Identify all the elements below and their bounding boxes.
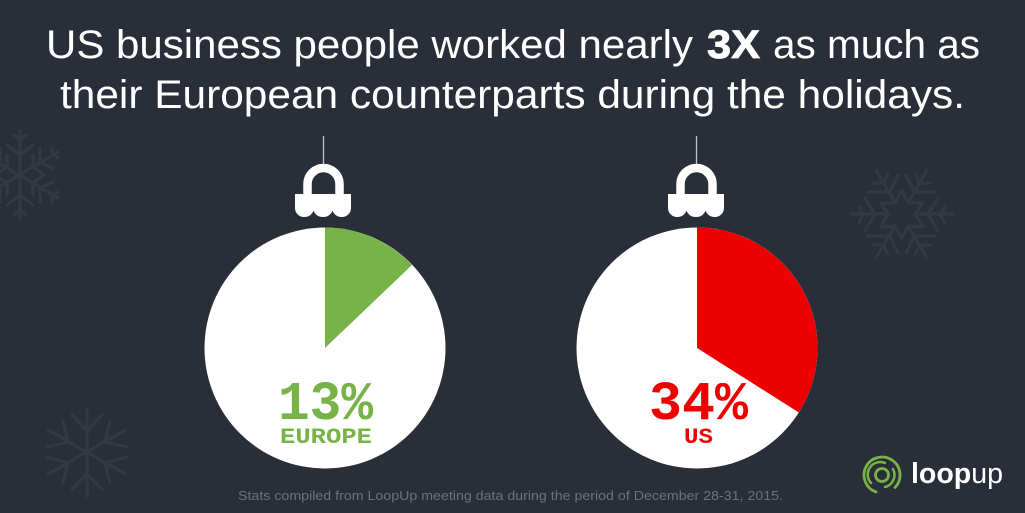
logo wordmark: loopup [911, 458, 1003, 490]
snowflake: left [0, 131, 58, 219]
logo: LoopUp [864, 457, 1003, 492]
ornament: Europe [204, 136, 446, 468]
title: 3X [707, 23, 760, 67]
title: their European counterparts during the holidays. [60, 73, 965, 117]
title: US business people worked nearly [46, 23, 693, 67]
ornament: US [576, 136, 818, 468]
snowflake: bottom left [47, 409, 127, 496]
stat: 34% US: US [684, 425, 713, 450]
title [46, 23, 980, 117]
pie chart: Europe 13% [204, 228, 446, 468]
ornament cap: Europe [295, 136, 351, 217]
stat: 13% Europe: 13% [278, 373, 374, 436]
pie chart: US 34% [576, 228, 818, 468]
snowflake: right [851, 170, 953, 258]
ornament cap: US [668, 136, 724, 217]
footnote: Stats compiled from LoopUp meeting data during the period of December 28-31, 2015. [238, 488, 783, 503]
title: as much as [773, 23, 980, 67]
logo icon: spiral [864, 457, 900, 492]
stat: 13% Europe: EUROPE [280, 425, 372, 450]
stat: 34% US: 34% [649, 373, 749, 436]
